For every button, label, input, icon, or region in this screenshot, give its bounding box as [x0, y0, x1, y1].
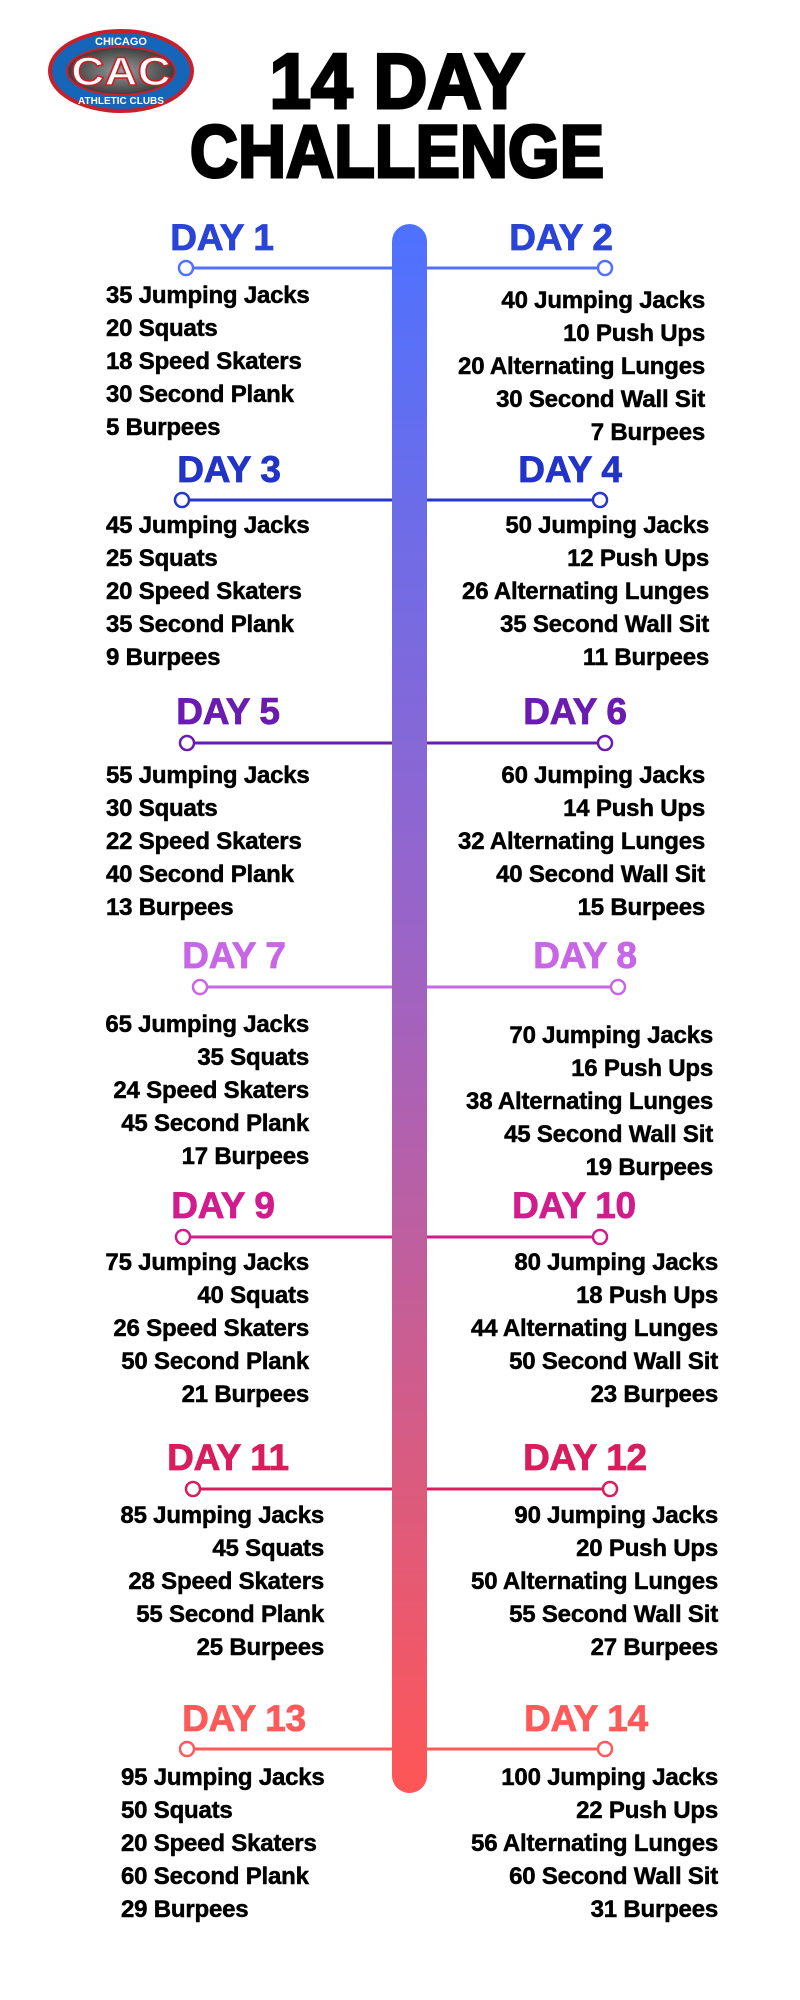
day 13: 20 Speed Skaters: [121, 1830, 317, 1857]
day 1: 20 Squats: [106, 315, 218, 342]
day 1: DAY 1: [170, 217, 274, 258]
day 5: DAY 5: [176, 691, 280, 732]
day 4: 26 Alternating Lunges: [462, 578, 709, 605]
day 3: 25 Squats: [106, 545, 218, 572]
day 9: 26 Speed Skaters: [113, 1315, 309, 1342]
day 11: [120, 1437, 325, 1661]
day 10: 23 Burpees: [591, 1381, 718, 1408]
timeline bar: [392, 224, 427, 1793]
title: CHALLENGE: [190, 110, 604, 193]
day 12: DAY 12: [523, 1437, 647, 1478]
day 13: 50 Squats: [121, 1797, 233, 1824]
day 4: 50 Jumping Jacks: [505, 512, 709, 539]
day 6: 15 Burpees: [578, 894, 705, 921]
day 11: 85 Jumping Jacks: [120, 1502, 324, 1529]
day 7: 65 Jumping Jacks: [105, 1011, 309, 1038]
logo: CAC: [48, 29, 194, 113]
day 5: 55 Jumping Jacks: [106, 762, 310, 789]
day 10: 80 Jumping Jacks: [514, 1249, 718, 1276]
day 9: 75 Jumping Jacks: [105, 1249, 309, 1276]
day 8: 38 Alternating Lunges: [466, 1088, 713, 1115]
day 14: 100 Jumping Jacks: [501, 1764, 718, 1791]
day 9: 40 Squats: [197, 1282, 309, 1309]
day 3: 35 Second Plank: [106, 611, 295, 638]
day 7: 35 Squats: [197, 1044, 309, 1071]
day 4: [462, 449, 709, 671]
day 13: [121, 1698, 325, 1923]
day 1: 5 Burpees: [106, 414, 220, 441]
day 10: 44 Alternating Lunges: [471, 1315, 718, 1342]
day 3: [106, 449, 310, 671]
logo: CAC: ATHLETIC CLUBS: [78, 96, 164, 107]
day 6: 60 Jumping Jacks: [501, 762, 705, 789]
day 11: 55 Second Plank: [136, 1601, 325, 1628]
day 11: 25 Burpees: [197, 1634, 324, 1661]
day 7: [105, 935, 310, 1170]
day 13: DAY 13: [182, 1698, 306, 1739]
day 3: 9 Burpees: [106, 644, 220, 671]
day 12: 50 Alternating Lunges: [471, 1568, 718, 1595]
day 10: [471, 1185, 718, 1408]
day 5: 22 Speed Skaters: [106, 828, 302, 855]
day 9: 50 Second Plank: [121, 1348, 310, 1375]
day 10: 50 Second Wall Sit: [509, 1348, 718, 1375]
day 1: 35 Jumping Jacks: [106, 282, 310, 309]
day 9: [105, 1185, 310, 1408]
day 10: DAY 10: [512, 1185, 636, 1226]
day 14: 60 Second Wall Sit: [509, 1863, 718, 1890]
day 4: 12 Push Ups: [567, 545, 709, 572]
day 7: 24 Speed Skaters: [113, 1077, 309, 1104]
day 2: 10 Push Ups: [563, 320, 705, 347]
day 13: 60 Second Plank: [121, 1863, 310, 1890]
day 9: 21 Burpees: [182, 1381, 309, 1408]
day 5: 13 Burpees: [106, 894, 233, 921]
day 2: [458, 217, 705, 446]
day 12: 90 Jumping Jacks: [514, 1502, 718, 1529]
day 6: [458, 691, 705, 921]
day 14: [471, 1698, 718, 1923]
day 8: [466, 935, 713, 1181]
title: 14 DAY: [269, 39, 525, 125]
day 8: 45 Second Wall Sit: [504, 1121, 713, 1148]
day 3: DAY 3: [177, 449, 281, 490]
day 6: 14 Push Ups: [563, 795, 705, 822]
day 6: 40 Second Wall Sit: [496, 861, 705, 888]
day 5: 30 Squats: [106, 795, 218, 822]
logo: CAC: CAC: [71, 50, 171, 94]
day 7: 17 Burpees: [182, 1143, 309, 1170]
day 3: 20 Speed Skaters: [106, 578, 302, 605]
day 3: 45 Jumping Jacks: [106, 512, 310, 539]
day 13: 95 Jumping Jacks: [121, 1764, 325, 1791]
day 2: 40 Jumping Jacks: [501, 287, 705, 314]
day 2: 20 Alternating Lunges: [458, 353, 705, 380]
day 12: 55 Second Wall Sit: [509, 1601, 718, 1628]
timeline connector lines: [182, 268, 618, 1749]
day 4: 11 Burpees: [583, 644, 709, 671]
logo: CAC: CHICAGO: [95, 36, 147, 48]
day 4: DAY 4: [518, 449, 622, 490]
day 7: 45 Second Plank: [121, 1110, 310, 1137]
day 13: 29 Burpees: [121, 1896, 248, 1923]
day 10: 18 Push Ups: [576, 1282, 718, 1309]
day 2: 7 Burpees: [591, 419, 705, 446]
day 5: 40 Second Plank: [106, 861, 295, 888]
day 11: DAY 11: [167, 1437, 289, 1478]
day 8: 19 Burpees: [586, 1154, 713, 1181]
day 11: 28 Speed Skaters: [128, 1568, 324, 1595]
day 7: DAY 7: [182, 935, 286, 976]
day 1: 30 Second Plank: [106, 381, 295, 408]
day 8: 70 Jumping Jacks: [509, 1022, 713, 1049]
day 9: DAY 9: [171, 1185, 275, 1226]
day 14: DAY 14: [524, 1698, 649, 1739]
day 8: 16 Push Ups: [571, 1055, 713, 1082]
day 12: [471, 1437, 718, 1661]
day 12: 20 Push Ups: [576, 1535, 718, 1562]
day 1: 18 Speed Skaters: [106, 348, 302, 375]
day 4: 35 Second Wall Sit: [500, 611, 709, 638]
day 6: 32 Alternating Lunges: [458, 828, 705, 855]
day 11: 45 Squats: [212, 1535, 324, 1562]
day 1: [106, 217, 310, 441]
timeline circles: [175, 261, 625, 1756]
day 2: 30 Second Wall Sit: [496, 386, 705, 413]
day 8: DAY 8: [533, 935, 637, 976]
day 5: [106, 691, 310, 921]
day 2: DAY 2: [509, 217, 613, 258]
day 14: 56 Alternating Lunges: [471, 1830, 718, 1857]
day 14: 22 Push Ups: [576, 1797, 718, 1824]
title: [190, 39, 604, 193]
day 6: DAY 6: [523, 691, 627, 732]
day 12: 27 Burpees: [591, 1634, 718, 1661]
day 14: 31 Burpees: [591, 1896, 718, 1923]
